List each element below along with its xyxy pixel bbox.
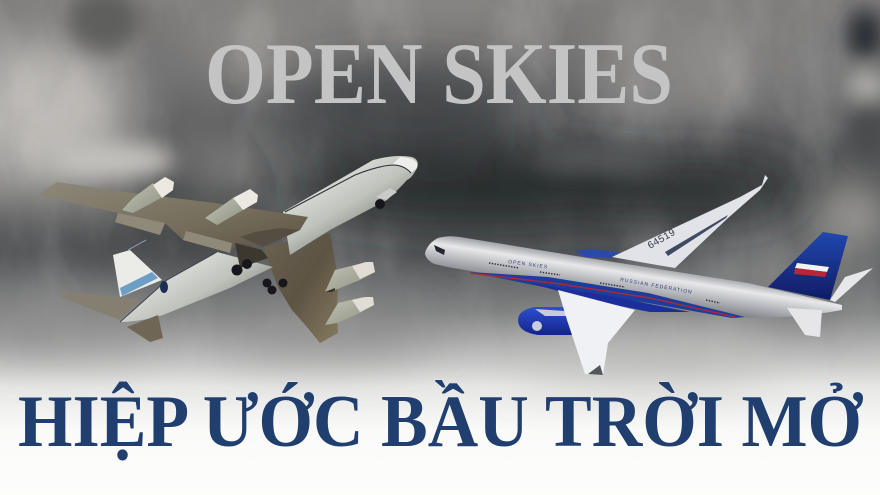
landing gear — [232, 188, 397, 294]
Russian flag — [794, 263, 829, 277]
lower stabilizer — [127, 315, 163, 342]
engine near — [518, 307, 575, 335]
main wing — [38, 182, 308, 253]
stabilizer rear — [830, 268, 873, 302]
nose windows — [434, 245, 445, 255]
cloud streaks — [0, 0, 872, 312]
lower wing — [558, 290, 635, 375]
engines — [122, 177, 375, 325]
stabilizer front — [787, 308, 822, 337]
roundel — [160, 281, 168, 293]
livery stripes — [470, 272, 745, 318]
far engine — [575, 249, 620, 258]
title: OPEN SKIES: OPEN SKIES — [205, 26, 673, 123]
plane: US OC-135 (left) — [38, 156, 418, 343]
tail fin — [113, 240, 162, 297]
plane: Russian Tu-214ON (right): RUSSIAN FEDERATION — [620, 277, 693, 296]
fuselage text: OPEN SKIES — [508, 259, 548, 271]
fuselage — [425, 236, 842, 318]
tail fin — [768, 232, 848, 300]
front fuselage — [283, 156, 418, 255]
upper stabilizer — [60, 292, 140, 320]
dark storm core — [270, 70, 800, 221]
rear fuselage — [120, 252, 273, 322]
windows — [489, 263, 720, 303]
plane: Russian Tu-214ON (right) — [425, 175, 873, 375]
lower wing — [263, 233, 338, 343]
plane: Russian Tu-214ON (right): 64519 — [646, 227, 678, 252]
upper wing — [612, 175, 768, 268]
